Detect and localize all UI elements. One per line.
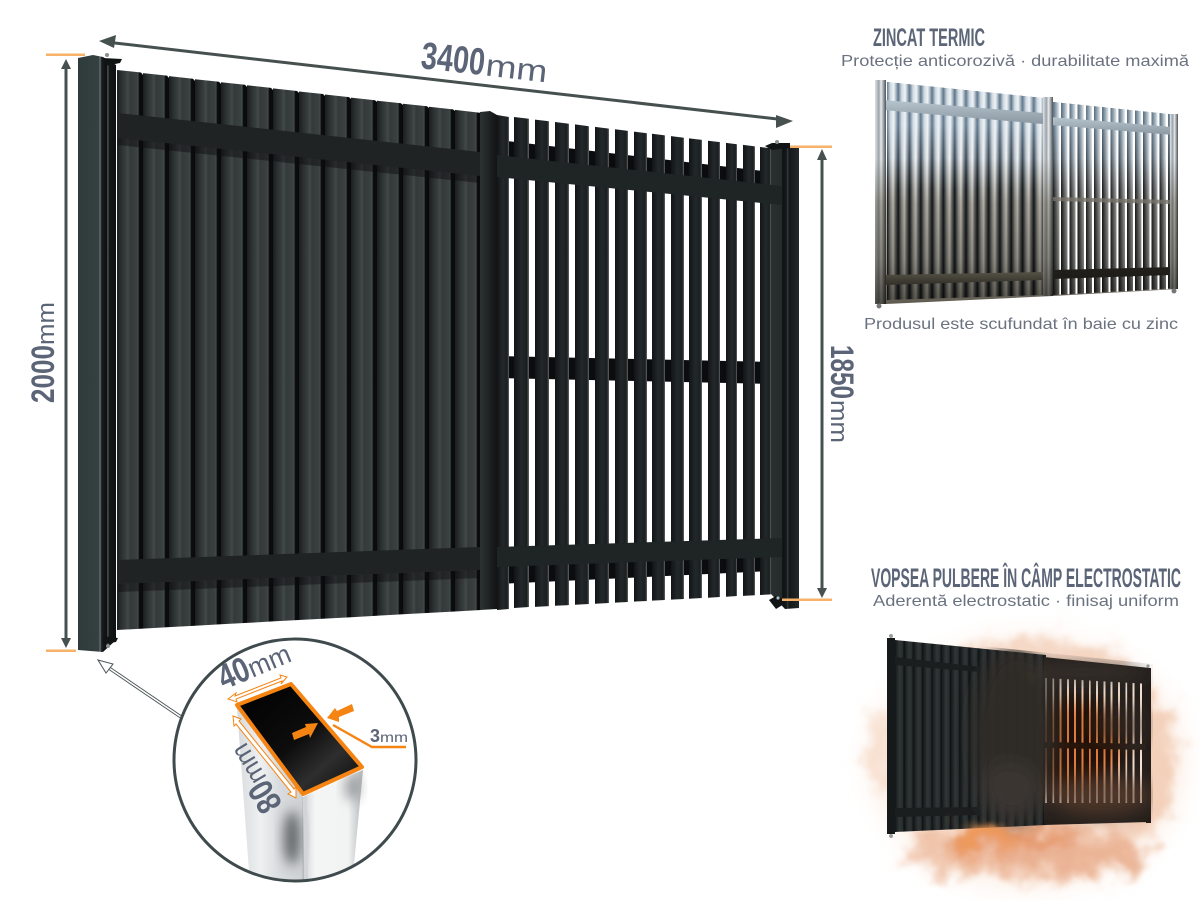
right leaf upper rail bbox=[497, 155, 782, 205]
subtitle: electrostatic adhesion: Aderentă electrostatic · finisaj uniform bbox=[873, 593, 1179, 610]
heading: zincat termic: ZINCAT TERMIC bbox=[873, 24, 985, 52]
dimension: gate width 3400mm: 3400 bbox=[419, 35, 487, 84]
panel: hot-dip galvanizing bbox=[841, 24, 1189, 333]
smoke over the gate bbox=[973, 647, 1152, 823]
left gate leaf: solid boards bbox=[117, 70, 481, 630]
dimension: gate height 1850mm bbox=[782, 146, 860, 601]
label: 80mm: 80 bbox=[240, 773, 290, 820]
right leaf lower rail bbox=[497, 538, 782, 567]
subtitle: corrosion protection: Protecție anticorozivă · durabilitate maximă bbox=[841, 53, 1189, 70]
detail circle: steel tube section bbox=[174, 632, 416, 885]
powder cloud behind gate bbox=[864, 640, 1174, 880]
dimension: post height 2000mm bbox=[25, 54, 85, 652]
label: 40mm: 40 bbox=[212, 649, 256, 697]
left leaf upper rail bbox=[118, 113, 480, 176]
main gate illustration bbox=[78, 53, 799, 652]
label: 3mm: 3 bbox=[370, 726, 380, 746]
dimension: gate width 3400mm bbox=[99, 35, 793, 128]
dimension: gate width 3400mm: mm bbox=[484, 48, 549, 89]
40mm width arrow bbox=[228, 675, 287, 702]
powder cloud below gate bbox=[953, 829, 1145, 869]
right post bbox=[771, 145, 799, 609]
left leaf lower rail bbox=[118, 547, 480, 584]
hinges bbox=[103, 53, 790, 648]
shadows under left rails bbox=[118, 137, 480, 592]
central stile bbox=[480, 111, 497, 610]
label: 3mm bbox=[370, 726, 408, 746]
powder-coated gate thumbnail bbox=[887, 634, 1151, 838]
label: 40mm bbox=[212, 632, 296, 697]
tube opening with orange rim bbox=[237, 684, 362, 794]
pointer arrow to tube detail bbox=[98, 660, 181, 717]
dimension: gate height 1850mm: mm bbox=[825, 400, 852, 443]
dimension: post height 2000mm: mm bbox=[33, 302, 60, 345]
galvanized gate thumbnail bbox=[875, 80, 1178, 308]
pale powder halo bbox=[878, 644, 1178, 880]
tube body bbox=[237, 708, 363, 885]
label: 80mm bbox=[219, 737, 290, 820]
right gate leaf: spaced pickets bbox=[497, 115, 771, 610]
panel: electrostatic powder coating bbox=[864, 562, 1181, 880]
left post bbox=[78, 55, 116, 652]
label: 40mm: mm bbox=[243, 639, 295, 683]
dimension: gate height 1850mm: 1850 bbox=[824, 345, 860, 399]
label: 80mm: mm bbox=[225, 738, 272, 790]
3mm wall thickness arrows bbox=[292, 704, 406, 747]
caption: zinc bath: Produsul este scufundat în baie cu zinc bbox=[864, 316, 1178, 333]
right leaf back strips bbox=[498, 140, 772, 584]
label: 3mm: mm bbox=[380, 729, 408, 745]
dimension: post height 2000mm: 2000 bbox=[25, 345, 61, 403]
80mm length arrow bbox=[233, 716, 296, 798]
